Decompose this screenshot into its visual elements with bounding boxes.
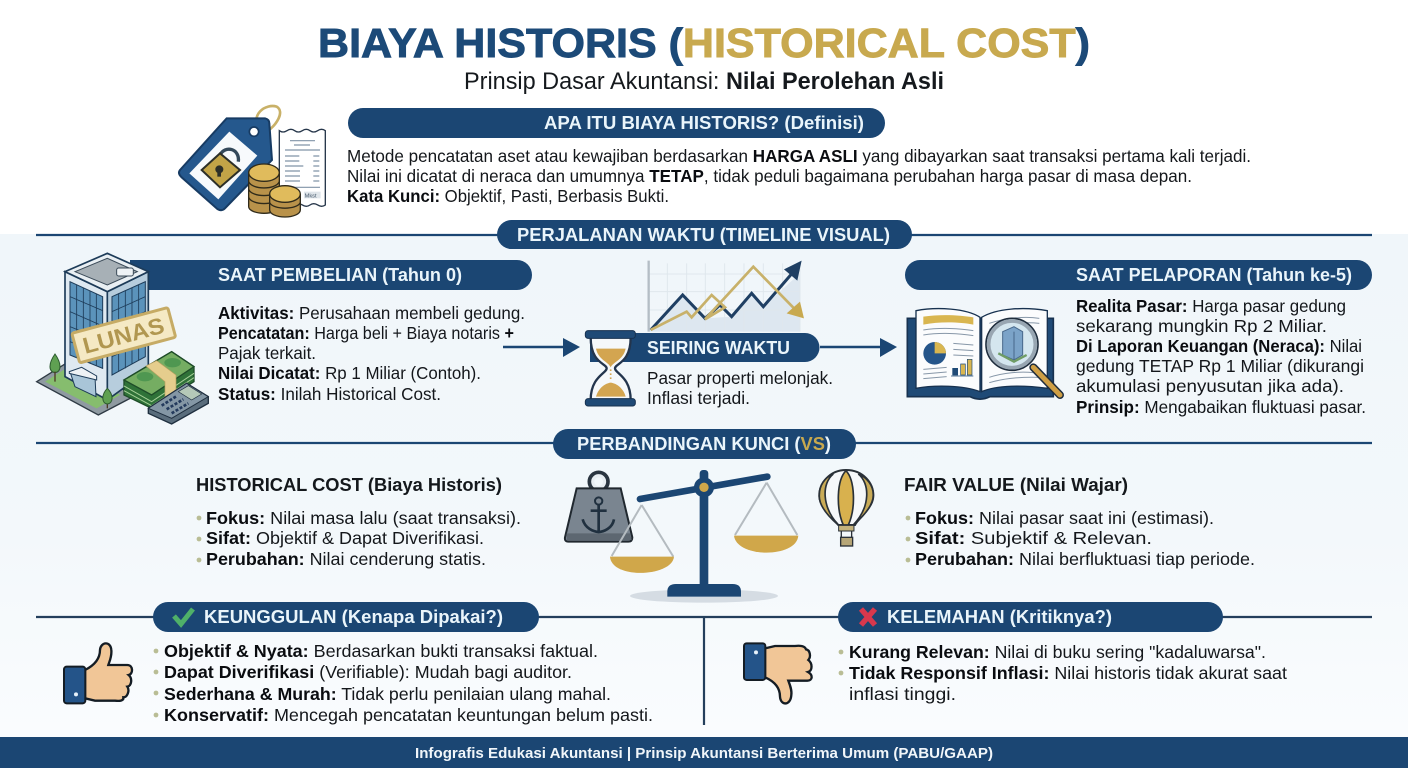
icon: building LUNAS with money and calculator: LUNAS [80,312,167,359]
text: seiring waktu: Pasar properti melonjak. [647,368,833,388]
bullets: kelemahan: Kurang Relevan: Nilai di buku sering "kadaluwarsa". [849,642,1266,662]
text: saat pelaporan: Realita Pasar: Harga pasar gedung [1076,296,1346,316]
bullets: keunggulan: Objektif & Nyata: Berdasarkan bukti transaksi faktual. [164,641,598,661]
heading: saat pembelian [130,260,532,290]
icon: hot air balloon [819,470,873,546]
icon: price tag with padlock, receipt and coins [179,106,325,217]
heading: historical cost: HISTORICAL COST (Biaya Historis) [196,474,502,495]
heading: timeline: PERJALANAN WAKTU (TIMELINE VISUAL) [517,225,890,245]
bullets: fair value [906,508,1255,569]
title [318,20,1090,95]
heading: timeline [497,220,912,249]
heading: perbandingan kunci [553,429,856,459]
panel: historical cost [196,474,521,569]
text: saat pelaporan: Prinsip: Mengabaikan fluktuasi pasar. [1076,397,1366,417]
heading: seiring waktu: SEIRING WAKTU [647,338,790,358]
text: saat pelaporan: gedung TETAP Rp 1 Miliar (dikurangi [1076,356,1364,376]
heading: kelemahan: KELEMAHAN (Kritiknya?) [887,607,1112,627]
title: BIAYA HISTORIS ( HISTORICAL COST ) [318,20,1090,66]
bullets: keunggulan [154,641,653,725]
icon: balance scale [610,470,798,603]
arrow: pembelian to waktu [503,338,580,357]
arrow: waktu to pelaporan [820,338,897,357]
icon: price tag with padlock, receipt and coins: Mkst [305,193,317,199]
bullets: keunggulan: Dapat Diverifikasi (Verifiable): Mudah bagi auditor. [164,662,572,682]
heading: fair value: FAIR VALUE (Nilai Wajar) [904,474,1128,495]
text: saat pembelian: Aktivitas: Perusahaan membeli gedung. [218,303,525,323]
footer [0,737,1408,768]
text: saat pembelian: Pencatatan: Harga beli + Biaya notaris + [218,323,514,343]
bullets: kelemahan: inflasi tinggi. [849,684,956,704]
bullets: historical cost [197,508,521,569]
icon: hourglass [585,331,635,406]
bullets: fair value: Perubahan: Nilai berfluktuasi tiap periode. [915,549,1255,569]
heading: saat pelaporan: SAAT PELAPORAN (Tahun ke-5) [1076,265,1352,285]
icon: open book with magnifier [907,309,1060,399]
text: saat pelaporan [1076,296,1366,417]
chart: market price lines [649,261,804,332]
icon: thumbs down [744,643,812,703]
bullets: fair value: Fokus: Nilai pasar saat ini (estimasi). [915,508,1214,528]
panel: definisi [347,108,1251,206]
bullets: kelemahan: Tidak Responsif Inflasi: Nilai historis tidak akurat saat [849,663,1287,683]
bullets: fair value: Sifat: Subjektif & Relevan. [915,528,1152,548]
text: saat pelaporan: Di Laporan Keuangan (Neraca): Nilai [1076,336,1362,356]
text: saat pembelian [218,303,525,404]
text: seiring waktu: Inflasi terjadi. [647,388,750,408]
title: Prinsip Dasar Akuntansi: Nilai Perolehan Asli [464,68,944,95]
bullets: keunggulan: Sederhana & Murah: Tidak perlu penilaian ulang mahal. [164,684,611,704]
icon: thumbs up [64,643,132,703]
text: definisi: Kata Kunci: Objektif, Pasti, Berbasis Bukti. [347,186,669,206]
text: saat pembelian: Status: Inilah Historical Cost. [218,384,441,404]
text: definisi: Metode pencatatan aset atau kewajiban berdasarkan HARGA ASLI yang dibayarkan saat transaksi pertama kali terjadi. [347,146,1251,166]
bullets: keunggulan: Konservatif: Mencegah pencatatan keuntungan belum pasti. [164,705,653,725]
text: saat pelaporan: akumulasi penyusutan jika ada). [1076,376,1344,396]
heading: definisi [348,108,885,138]
text: saat pembelian: Nilai Dicatat: Rp 1 Miliar (Contoh). [218,363,481,383]
icon: building LUNAS with money and calculator [37,253,208,424]
bullets: historical cost: Fokus: Nilai masa lalu (saat transaksi). [206,508,521,528]
footer: Infografis Edukasi Akuntansi | Prinsip Akuntansi Berterima Umum (PABU/GAAP) [415,745,993,762]
heading: kelemahan [838,602,1223,632]
heading: keunggulan: KEUNGGULAN (Kenapa Dipakai?) [204,607,503,627]
bullets: historical cost: Perubahan: Nilai cenderung statis. [206,549,486,569]
bullets: historical cost: Sifat: Objektif & Dapat Diverifikasi. [206,528,484,548]
bullets: kelemahan [839,642,1287,704]
text: saat pembelian: Pajak terkait. [218,343,316,363]
heading: seiring waktu [590,333,820,362]
heading: saat pelaporan [905,260,1372,290]
panel: kelemahan [744,602,1287,704]
text: definisi: Nilai ini dicatat di neraca dan umumnya TETAP, tidak peduli bagaimana perubahan harga pasar di masa depan. [347,166,1192,186]
text: definisi [347,146,1251,206]
panel: fair value [904,474,1255,569]
heading: perbandingan kunci: PERBANDINGAN KUNCI (VS) [577,434,831,454]
text: saat pelaporan: sekarang mungkin Rp 2 Miliar. [1076,316,1327,336]
text: seiring waktu [647,368,833,408]
heading: definisi: APA ITU BIAYA HISTORIS? (Definisi) [544,113,864,133]
panel: keunggulan [64,602,653,725]
heading: saat pembelian: SAAT PEMBELIAN (Tahun 0) [218,265,462,285]
heading: keunggulan [153,602,539,632]
icon: anchor weight [565,472,632,542]
